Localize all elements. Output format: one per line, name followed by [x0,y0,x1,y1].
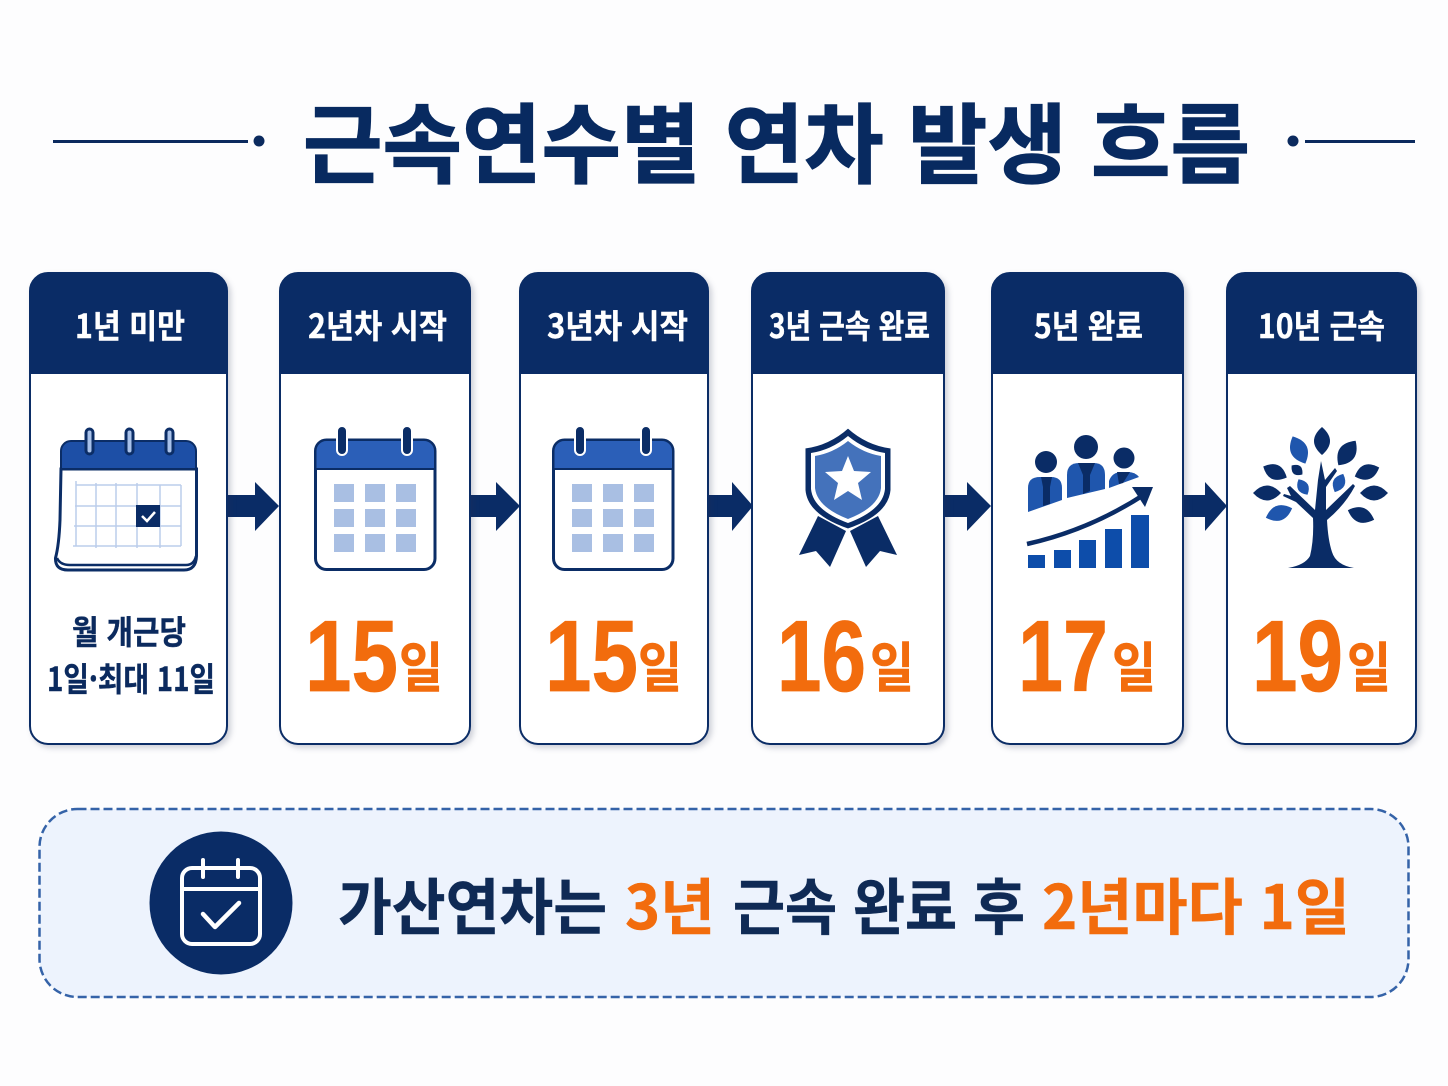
card header [1226,273,1416,374]
value: 16일: 16 [777,601,866,713]
callout text: 근속 완료 후 [733,858,1025,947]
title: 근속연수별 연차 발생 흐름 [303,76,1250,202]
panel: 2년차 시작 [280,273,470,744]
panel: 1년 미만 [30,273,228,744]
arrow 3 [708,482,753,531]
card body [520,273,708,744]
card body [992,273,1183,744]
icon: calendar [316,426,435,570]
callout text: 3년 [625,858,715,947]
icon: calendar check badge [150,832,292,974]
icon: wall calendar with check [55,429,197,570]
value: 16일: 일 [870,624,914,703]
header label: 10년 근속 [1258,300,1385,348]
value: 15일: 15 [545,601,638,713]
value: 17일: 17 [1018,601,1108,713]
header label: 3년 근속 완료 [769,300,930,348]
arrow 4 [944,482,991,531]
panel: 3년차 시작 [520,273,708,744]
arrow 1 [227,482,279,531]
panel: 3년 근속 완료 [752,273,944,744]
value: 19일: 일 [1347,624,1391,703]
title rule: left [53,136,264,146]
card body [30,273,227,744]
card header [992,273,1184,374]
icon: people and growth chart [1027,435,1153,568]
header label: 3년차 시작 [547,300,688,348]
callout: additional leave rule [40,809,1408,997]
panel: 10년 근속 [1226,273,1416,744]
value: 19일: 19 [1252,601,1343,713]
header label: 2년차 시작 [308,300,447,348]
card body [752,273,944,744]
value: 17일: 일 [1112,624,1156,703]
header label: 1년 미만 [75,300,185,348]
card header [520,273,708,374]
callout text [338,858,1350,947]
arrow 5 [1183,482,1227,531]
title rule: right [1288,136,1415,146]
text: monthly accrual: 1일·최대 11일 [47,653,215,701]
card header [30,273,228,374]
callout text: 가산연차는 [338,858,607,947]
card header [752,273,944,374]
value: 15일: 일 [399,624,443,703]
card body [280,273,470,744]
callout text: 2년마다 1일 [1042,858,1350,947]
value: 15일: 15 [305,601,398,713]
arrow 2 [470,482,520,531]
panel: 5년 완료 [992,273,1184,744]
icon: shield badge with ribbons [799,428,897,567]
icon: calendar [554,426,673,570]
callout background [40,809,1408,997]
card header [280,273,470,374]
card body [1227,273,1416,744]
header label: 5년 완료 [1034,300,1143,348]
value: 15일: 일 [638,624,682,703]
text: monthly accrual: 월 개근당 [72,606,186,654]
icon: tree [1253,427,1388,568]
text: monthly accrual [47,606,215,701]
